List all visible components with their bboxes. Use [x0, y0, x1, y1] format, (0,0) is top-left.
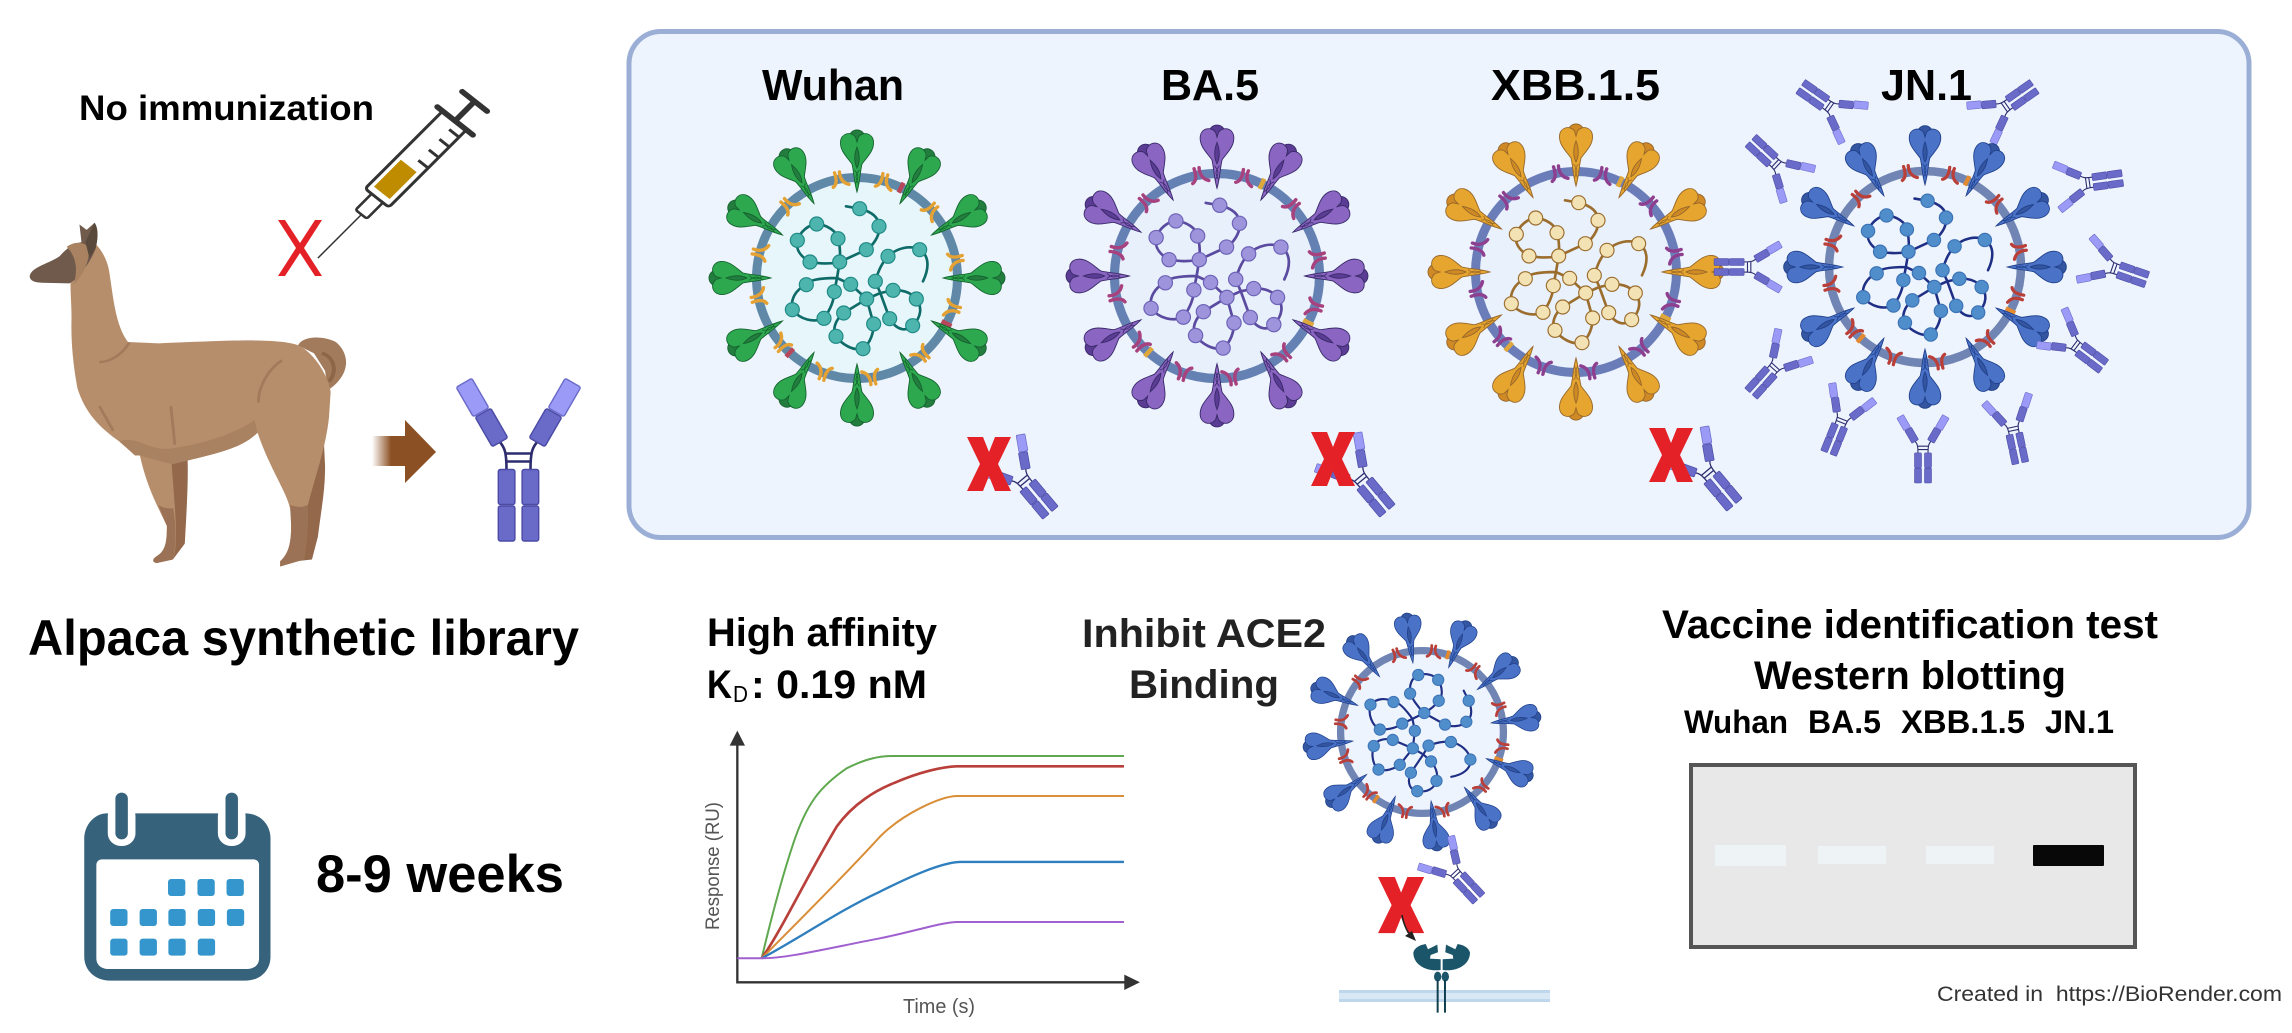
lane label: Wuhan: Wuhan	[1684, 704, 1788, 740]
icon: alpaca	[30, 223, 346, 567]
virus: XBB.1.5	[1428, 124, 1724, 420]
panel: variant viruses	[629, 32, 2249, 538]
virus: Wuhan	[709, 130, 1005, 426]
text: KD value: : 0.19 nM	[751, 663, 927, 707]
antibody with X: BA.5	[1311, 428, 1411, 531]
axis label: Response (RU): Response (RU)	[703, 802, 724, 930]
virus: JN.1 ACE2 assay	[1287, 597, 1557, 867]
icon: red X on syringe	[278, 220, 322, 276]
antibodies bound to JN.1	[1714, 65, 2155, 483]
antibody: neutralizing	[1415, 832, 1498, 916]
icon: ACE2 receptor	[1413, 944, 1470, 1013]
icon: syringe	[300, 87, 492, 272]
icon: antibody large	[456, 378, 581, 541]
antibody with X: Wuhan	[967, 430, 1074, 533]
arrow: blocked binding	[1402, 915, 1416, 941]
western blot	[1691, 765, 2135, 947]
lane label: JN.1: JN.1	[2045, 704, 2114, 740]
heading: BA.5: BA.5	[1161, 61, 1259, 110]
membrane	[1339, 990, 1550, 1002]
text: Inhibit ACE2: Inhibit ACE2	[1082, 612, 1326, 656]
antibody with X: XBB.1.5	[1649, 422, 1758, 525]
text: 8-9 weeks: 8-9 weeks	[316, 845, 564, 904]
heading: XBB.1.5: XBB.1.5	[1491, 61, 1660, 110]
lane label: BA.5: BA.5	[1808, 704, 1881, 740]
text: Western blotting: Western blotting	[1754, 654, 2066, 698]
virus: BA.5	[1066, 125, 1368, 427]
antibody: top right behind JN.1 spike	[1963, 65, 2049, 147]
arrow: brown	[372, 420, 436, 483]
heading: JN.1: JN.1	[1881, 61, 1972, 110]
heading: Wuhan: Wuhan	[762, 61, 904, 110]
line chart: binding response	[730, 731, 1140, 990]
text: No immunization: No immunization	[79, 89, 374, 128]
credit: BioRender: Created in https://BioRender.com	[1937, 983, 2282, 1006]
text: KD value: K	[707, 663, 732, 707]
text: Vaccine identification test: Vaccine identification test	[1662, 603, 2158, 647]
title: Alpaca synthetic library: Alpaca synthetic library	[28, 610, 579, 666]
text: Binding: Binding	[1129, 663, 1279, 707]
lane label: XBB.1.5: XBB.1.5	[1901, 704, 2025, 740]
text: High affinity: High affinity	[707, 611, 938, 655]
axis label: Time (s): Time (s)	[903, 996, 975, 1018]
icon: calendar	[84, 793, 270, 981]
icon: red X over ACE2	[1378, 877, 1424, 933]
text: KD value: D	[733, 681, 748, 707]
virus: JN.1	[1784, 126, 2066, 408]
